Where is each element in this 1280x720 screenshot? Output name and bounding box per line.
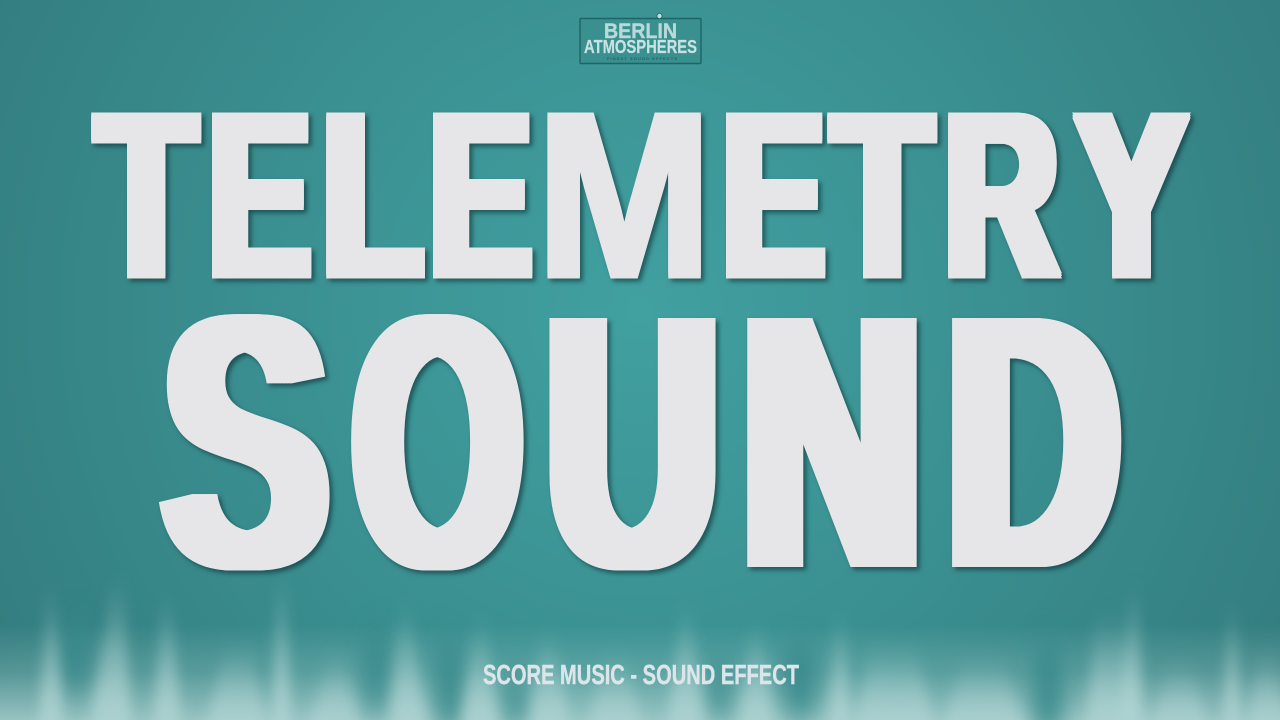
title: TELEMETRY: Y	[1077, 64, 1185, 326]
title: TELEMETRY: R	[945, 64, 1058, 326]
title: SOUND: O	[353, 239, 522, 644]
title: TELEMETRY: E	[723, 64, 824, 326]
title: SOUND: D	[948, 239, 1119, 644]
title: TELEMETRY: E	[430, 64, 531, 326]
logo: Berlin Atmospheres: BERLIN	[604, 20, 677, 43]
logo: Berlin Atmospheres: ATMOSPHERES	[584, 37, 697, 57]
title: TELEMETRY: E	[209, 64, 310, 326]
title: TELEMETRY: T	[833, 64, 931, 326]
logo: Berlin Atmospheres: FINEST SOUND EFFECTS	[607, 56, 677, 61]
logo: Berlin Atmospheres	[580, 13, 701, 63]
title: SOUND: S	[164, 239, 327, 644]
title: TELEMETRY: T	[97, 64, 195, 326]
waveform at bottom	[0, 582, 1280, 720]
title: TELEMETRY: M	[536, 64, 713, 326]
subtitle: SCORE MUSIC - SOUND EFFECT	[483, 659, 799, 690]
title: TELEMETRY	[91, 64, 1196, 326]
title: SOUND: U	[547, 239, 719, 644]
title: TELEMETRY: L	[323, 64, 422, 326]
title: SOUND	[158, 239, 1126, 644]
title: SOUND: N	[743, 239, 921, 644]
